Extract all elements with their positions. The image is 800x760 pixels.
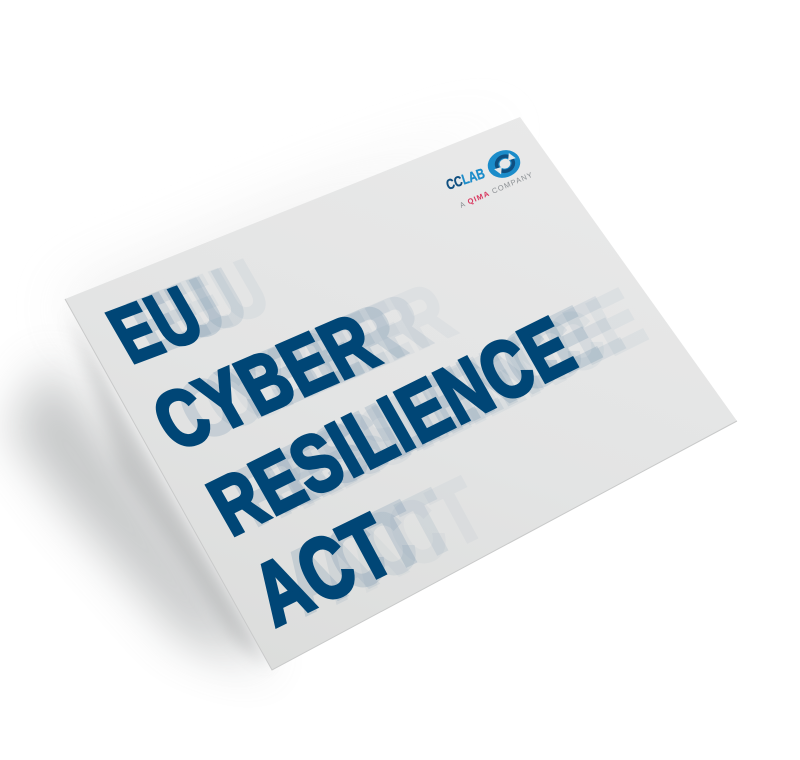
ghost echoes of title: ACT xyxy=(328,459,500,608)
ghost echoes of title: RESILIENCE xyxy=(218,289,613,543)
ghost echoes of title: ACT xyxy=(267,483,439,632)
title xyxy=(94,271,589,644)
icon: logo mark xyxy=(484,146,524,182)
ghost echoes of title: EU xyxy=(138,253,262,362)
title: EU xyxy=(94,271,218,380)
ghost echoes of title: CYBER xyxy=(163,286,418,458)
ghost echoes of title: RESILIENCE xyxy=(264,271,659,525)
ghost echoes of title: ACT xyxy=(298,471,470,620)
cast shadow xyxy=(10,117,520,668)
title: RESILIENCE xyxy=(194,299,589,553)
logo wordmark: CCLAB xyxy=(444,165,487,193)
logo tagline: A QIMA COMPANY xyxy=(458,170,535,210)
ghost echoes of title xyxy=(116,244,659,632)
ghost echoes of title: RESILIENCE xyxy=(241,280,636,534)
title: CYBER xyxy=(138,296,393,468)
ghost echoes of title: EU xyxy=(160,244,284,353)
ghost echoes of title: EU xyxy=(116,262,240,371)
ghost echoes of title: CYBER xyxy=(188,276,443,448)
title: ACT xyxy=(237,495,409,644)
ghost echoes of title: CYBER xyxy=(213,266,468,438)
panel: brochure card xyxy=(65,117,737,670)
logo: CCLAB xyxy=(444,146,535,210)
